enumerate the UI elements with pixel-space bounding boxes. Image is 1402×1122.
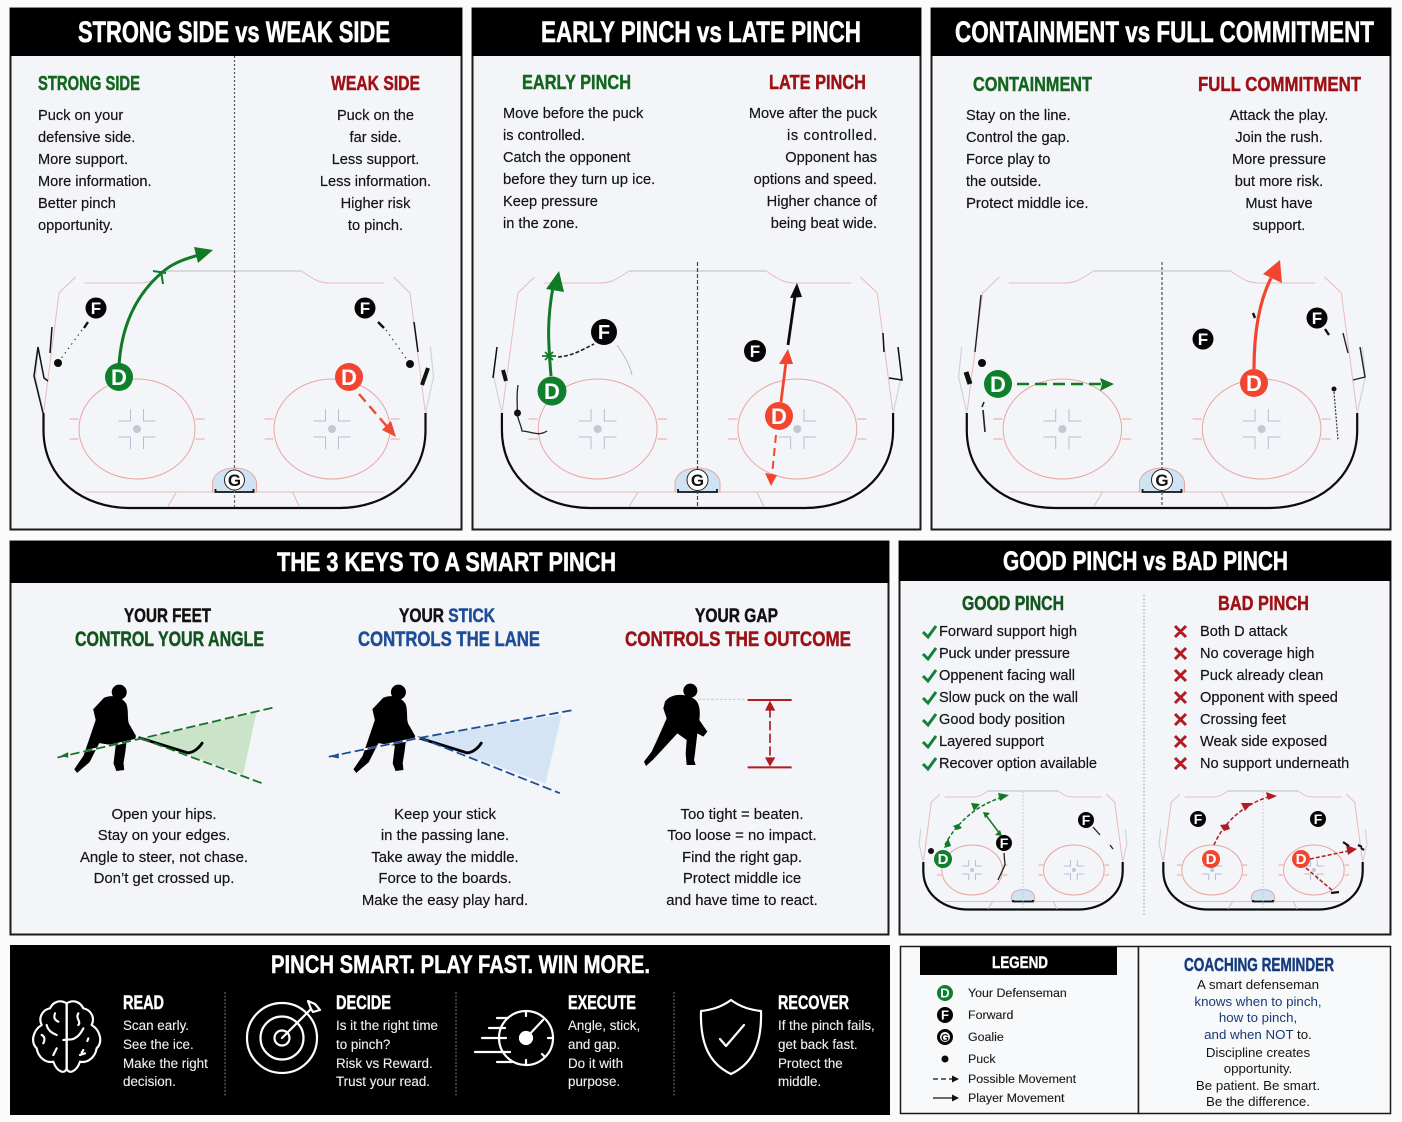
text: early pinch details: Catch the opponent — [503, 150, 630, 166]
key 3 text: Find the right gap. — [682, 850, 802, 866]
text: containment details: Stay on the line. — [966, 108, 1071, 124]
goalie — [224, 470, 244, 490]
text: late pinch details: being beat wide. — [771, 216, 877, 232]
bad pinch checklist: Opponent with speed — [1200, 690, 1338, 706]
banner title: PINCH SMART. PLAY FAST. WIN MORE. — [271, 951, 650, 979]
bad pinch checklist: Crossing feet — [1200, 712, 1286, 728]
key 1 text: Open your hips. — [111, 807, 217, 823]
bad pinch checklist: No coverage high — [1200, 646, 1314, 662]
key 1 text — [80, 807, 248, 887]
player: F center: F — [1198, 330, 1208, 349]
text: execute: Do it with — [568, 1056, 623, 1071]
legend: your defenseman: Your Defenseman — [968, 986, 1067, 1000]
text: weak side details: Puck on the — [337, 108, 414, 124]
mini player: D green: D — [938, 851, 949, 868]
key 2 text: Take away the middle. — [371, 850, 519, 866]
coaching reminder text: A smart defenseman — [1197, 977, 1319, 992]
text: recover: If the pinch fails, — [778, 1018, 875, 1033]
subheading: weak side: WEAK SIDE — [331, 73, 420, 95]
text: full commitment details: Join the rush. — [1235, 130, 1323, 146]
text: full commitment details — [1230, 108, 1328, 234]
player: D green: D — [544, 379, 560, 404]
text: read: decision. — [123, 1074, 176, 1089]
text: full commitment details: support. — [1253, 218, 1305, 234]
legend: your defenseman — [937, 985, 1067, 1001]
key 3 text: Protect middle ice — [683, 871, 801, 887]
player: F late: F — [750, 342, 760, 361]
key 3 text: Too tight = beaten. — [681, 807, 803, 823]
heading: early pinch vs late pinch: EARLY PINCH vs LATE PINCH — [541, 16, 861, 49]
text: full commitment details: More pressure — [1232, 152, 1326, 168]
text: recover: Protect the — [778, 1056, 843, 1071]
subheading: bad pinch: BAD PINCH — [1218, 593, 1309, 615]
key 2 text: in the passing lane. — [381, 828, 509, 844]
mini player: F far — [1078, 812, 1094, 828]
player: D red — [765, 402, 793, 430]
good pinch checklist: Slow puck on the wall — [939, 690, 1078, 706]
key 3 text: Too loose = no impact. — [667, 828, 817, 844]
good pinch checklist — [923, 624, 1097, 772]
panel: strong side vs weak side — [10, 8, 462, 530]
banner: pinch smart — [10, 945, 890, 1115]
heading: strong side vs weak side: STRONG SIDE vs WEAK SIDE — [78, 16, 390, 49]
legend: player movement: Player Movement — [968, 1091, 1065, 1105]
text: containment details: Protect middle ice. — [966, 196, 1088, 212]
key 2 text: Keep your stick — [394, 807, 496, 823]
text: weak side details: Higher risk — [341, 196, 411, 212]
text: strong side details: defensive side. — [38, 130, 135, 146]
player: F center — [1192, 328, 1214, 350]
green early pinch arrow — [542, 271, 564, 376]
mini player: F far: F — [1082, 812, 1091, 828]
goalie — [687, 470, 708, 490]
coaching reminder text: how to pinch, — [1219, 1010, 1297, 1025]
text: late pinch details: options and speed. — [754, 172, 877, 188]
player: D green: D — [111, 365, 127, 390]
key 1 text: Stay on your edges. — [98, 828, 230, 844]
text: recover: middle. — [778, 1074, 821, 1089]
mini player: D red left — [1202, 850, 1220, 868]
legend heading: LEGEND — [992, 953, 1048, 972]
key 3 heading: YOUR GAP — [695, 606, 778, 627]
text: recover — [778, 993, 875, 1089]
legend: goalie — [938, 1030, 1004, 1044]
key 3 heading: CONTROLS THE OUTCOME — [625, 628, 851, 651]
mini player: D red left: D — [1206, 851, 1217, 868]
text: early pinch details: Keep pressure — [503, 194, 598, 210]
player: F left — [86, 298, 106, 318]
good pinch checklist: Layered support — [939, 734, 1044, 750]
icon: brain — [33, 1001, 100, 1072]
goalie — [1152, 470, 1172, 490]
text: read: Scan early. — [123, 1018, 189, 1033]
text: late pinch details: Move after the puck — [749, 106, 878, 122]
coaching reminder text: knows when to pinch, — [1194, 994, 1322, 1009]
legend: possible movement: Possible Movement — [968, 1072, 1077, 1086]
text: weak side details — [320, 108, 431, 234]
heading: good vs bad: GOOD PINCH vs BAD PINCH — [1003, 546, 1288, 576]
late pinch black arrow — [788, 283, 802, 345]
key 2 text — [362, 807, 528, 909]
text: strong side details: opportunity. — [38, 218, 113, 234]
text: full commitment details: Must have — [1245, 196, 1313, 212]
good pinch checklist: Oppenent facing wall — [939, 668, 1075, 684]
text: decide: Risk vs Reward. — [336, 1056, 433, 1071]
subheading: late pinch: LATE PINCH — [769, 72, 866, 94]
mini player: F left — [1190, 811, 1206, 827]
text: strong side details: More information. — [38, 174, 152, 190]
player: D red: D — [1246, 371, 1262, 396]
mini player: F right: F — [1314, 811, 1323, 827]
forward support dotted line and puck trail — [514, 344, 632, 434]
text: weak side details: Less support. — [332, 152, 419, 168]
legend: forward: Forward — [968, 1008, 1014, 1022]
green pinch arrow — [119, 247, 213, 365]
mini player: F left: F — [1194, 811, 1203, 827]
text: late pinch details — [749, 106, 878, 232]
player: F right: F — [360, 299, 370, 318]
forward passing lanes and pucks — [54, 322, 414, 368]
rink diagram — [493, 262, 902, 508]
text: early pinch details — [503, 106, 655, 232]
text: read — [123, 993, 208, 1089]
key 2: your stick — [329, 606, 573, 909]
goalie: G — [1155, 471, 1169, 490]
text: decide: DECIDE — [336, 993, 391, 1014]
text: weak side details: Less information. — [320, 174, 431, 190]
key 1 text: Angle to steer, not chase. — [80, 850, 248, 866]
text: late pinch details: Opponent has — [785, 150, 877, 166]
player: F support: F — [598, 322, 610, 344]
text: execute: Angle, stick, — [568, 1018, 640, 1033]
mini player: D green — [934, 850, 952, 868]
mini player: D red right: D — [1296, 851, 1307, 868]
text: full commitment details: but more risk. — [1235, 174, 1323, 190]
text: weak side details: far side. — [350, 130, 401, 146]
player: F right — [354, 298, 376, 318]
key 2 heading — [358, 606, 540, 651]
icon: target — [247, 1001, 320, 1073]
text: late pinch details: Higher chance of — [767, 194, 878, 210]
legend: goalie: Goalie — [968, 1030, 1004, 1044]
bad pinch checklist: Both D attack — [1200, 624, 1288, 640]
player: D red: D — [771, 404, 787, 429]
pucks and small trails — [978, 313, 1338, 440]
key 3 text: and have time to react. — [666, 893, 818, 909]
text: strong side details: More support. — [38, 152, 128, 168]
text: decide: to pinch? — [336, 1037, 390, 1052]
player: D red — [335, 363, 363, 391]
text: early pinch details: is controlled. — [503, 128, 585, 144]
text: read: Make the right — [123, 1056, 208, 1071]
panel: the 3 keys to a smart pinch — [10, 541, 889, 934]
text: decide: Is it the right time — [336, 1018, 438, 1033]
text: containment details: Control the gap. — [966, 130, 1070, 146]
player: D green: D — [990, 372, 1006, 397]
rink diagram — [34, 247, 434, 508]
panel: coaching reminder — [1138, 946, 1390, 1114]
late pinch red arrow — [779, 349, 793, 402]
player: D green — [538, 376, 566, 406]
text: early pinch details: in the zone. — [503, 216, 578, 232]
player: D red: D — [341, 365, 357, 390]
key 2 text: Make the easy play hard. — [362, 893, 528, 909]
mini player: F: F — [1000, 835, 1009, 851]
mini rink: bad pinch — [1159, 791, 1367, 910]
skater with blue lane wedge — [329, 685, 573, 793]
text: recover: get back fast. — [778, 1037, 858, 1052]
player: D green — [984, 370, 1012, 398]
coaching reminder text: Be the difference. — [1206, 1094, 1310, 1109]
text: recover: RECOVER — [778, 993, 849, 1014]
skater with gap measure — [644, 684, 792, 767]
text: weak side details: to pinch. — [348, 218, 403, 234]
goalie: G — [228, 471, 241, 490]
key 3 heading — [625, 606, 851, 651]
text: read: See the ice. — [123, 1037, 194, 1052]
skater with green angle wedge — [57, 685, 273, 784]
text: decide: Trust your read. — [336, 1074, 430, 1089]
green dashed arrow — [1017, 378, 1114, 391]
mini player: D red right — [1292, 850, 1310, 868]
player: F late — [744, 340, 766, 362]
key 1 text: Don’t get crossed up. — [94, 871, 234, 887]
player: F support — [591, 319, 617, 345]
text: early pinch details: Move before the puck — [503, 106, 644, 122]
panel: legend — [900, 946, 1138, 1114]
legend: forward — [937, 1007, 1014, 1023]
rink diagram — [959, 260, 1365, 508]
good pinch checklist: Forward support high — [939, 624, 1077, 640]
player: F right: F — [1312, 309, 1322, 328]
text: execute: purpose. — [568, 1074, 620, 1089]
good pinch checklist: Good body position — [939, 712, 1065, 728]
coaching reminder text — [1194, 977, 1322, 1109]
subheading: containment: CONTAINMENT — [973, 74, 1092, 96]
mini player: F right — [1310, 811, 1326, 827]
key 2 heading: YOUR STICK — [399, 606, 495, 627]
text: containment details: Force play to — [966, 152, 1050, 168]
icon: shield — [701, 1000, 761, 1074]
legend: goalie: G — [941, 1033, 949, 1044]
coaching reminder text: Discipline creates — [1206, 1045, 1310, 1060]
key 1: your feet — [57, 606, 273, 887]
text: strong side details: Puck on your — [38, 108, 123, 124]
text: execute: EXECUTE — [568, 993, 636, 1014]
panel: early pinch vs late pinch — [472, 8, 921, 530]
text: full commitment details: Attack the play. — [1230, 108, 1328, 124]
bad pinch checklist — [1175, 624, 1349, 772]
key 1 heading — [75, 606, 264, 651]
legend: forward: F — [941, 1008, 949, 1022]
text: early pinch details: before they turn up ice. — [503, 172, 655, 188]
coaching reminder text: Be patient. Be smart. — [1196, 1078, 1320, 1093]
key 3 text — [666, 807, 818, 909]
text: containment details — [966, 108, 1088, 212]
text: strong side details — [38, 108, 152, 234]
text: late pinch details: is controlled. — [787, 128, 877, 144]
legend: your defenseman: D — [940, 986, 950, 1000]
red dashed arrow — [359, 394, 396, 437]
mini rink: good pinch — [919, 791, 1127, 910]
legend: puck: Puck — [968, 1052, 996, 1066]
player: D green — [105, 363, 133, 391]
subheading: early pinch: EARLY PINCH — [522, 72, 631, 94]
key 3: your gap — [625, 606, 851, 909]
red commitment arrow — [1254, 260, 1282, 369]
text: execute — [568, 993, 640, 1089]
key 1 heading: YOUR FEET — [124, 606, 211, 627]
panel: containment vs full commitment — [931, 8, 1391, 530]
text: strong side details: Better pinch — [38, 196, 116, 212]
coaching reminder text: opportunity. — [1224, 1061, 1292, 1076]
bad pinch checklist: Puck already clean — [1200, 668, 1323, 684]
legend: puck — [942, 1052, 996, 1066]
player: D red — [1240, 369, 1268, 397]
key 1 heading: CONTROL YOUR ANGLE — [75, 628, 264, 651]
red dashed retreat arrow — [765, 435, 777, 486]
bad pinch checklist: Weak side exposed — [1200, 734, 1327, 750]
panel: good pinch vs bad pinch — [899, 541, 1391, 934]
good pinch checklist: Puck under pressure — [939, 646, 1070, 662]
key 2 heading: CONTROLS THE LANE — [358, 628, 540, 651]
key 2 text: Force to the boards. — [378, 871, 512, 887]
text: containment details: the outside. — [966, 174, 1041, 190]
bad pinch checklist: No support underneath — [1200, 756, 1349, 772]
coaching reminder text: and when NOT to. — [1204, 1027, 1312, 1042]
subheading: strong side: STRONG SIDE — [38, 73, 140, 95]
subheading: full commitment: FULL COMMITMENT — [1198, 74, 1361, 96]
mini player: F — [996, 835, 1012, 851]
player: F left: F — [91, 299, 101, 318]
text: decide — [336, 993, 438, 1089]
text: execute: and gap. — [568, 1037, 620, 1052]
heading: 3 keys: THE 3 KEYS TO A SMART PINCH — [277, 547, 616, 577]
text: read: READ — [123, 993, 164, 1014]
good pinch checklist: Recover option available — [939, 756, 1097, 772]
coaching reminder heading: COACHING REMINDER — [1184, 955, 1334, 975]
goalie: G — [691, 471, 704, 490]
subheading: good pinch: GOOD PINCH — [962, 593, 1064, 615]
icon: speed gauge — [475, 1011, 553, 1065]
player: F right — [1306, 308, 1328, 328]
